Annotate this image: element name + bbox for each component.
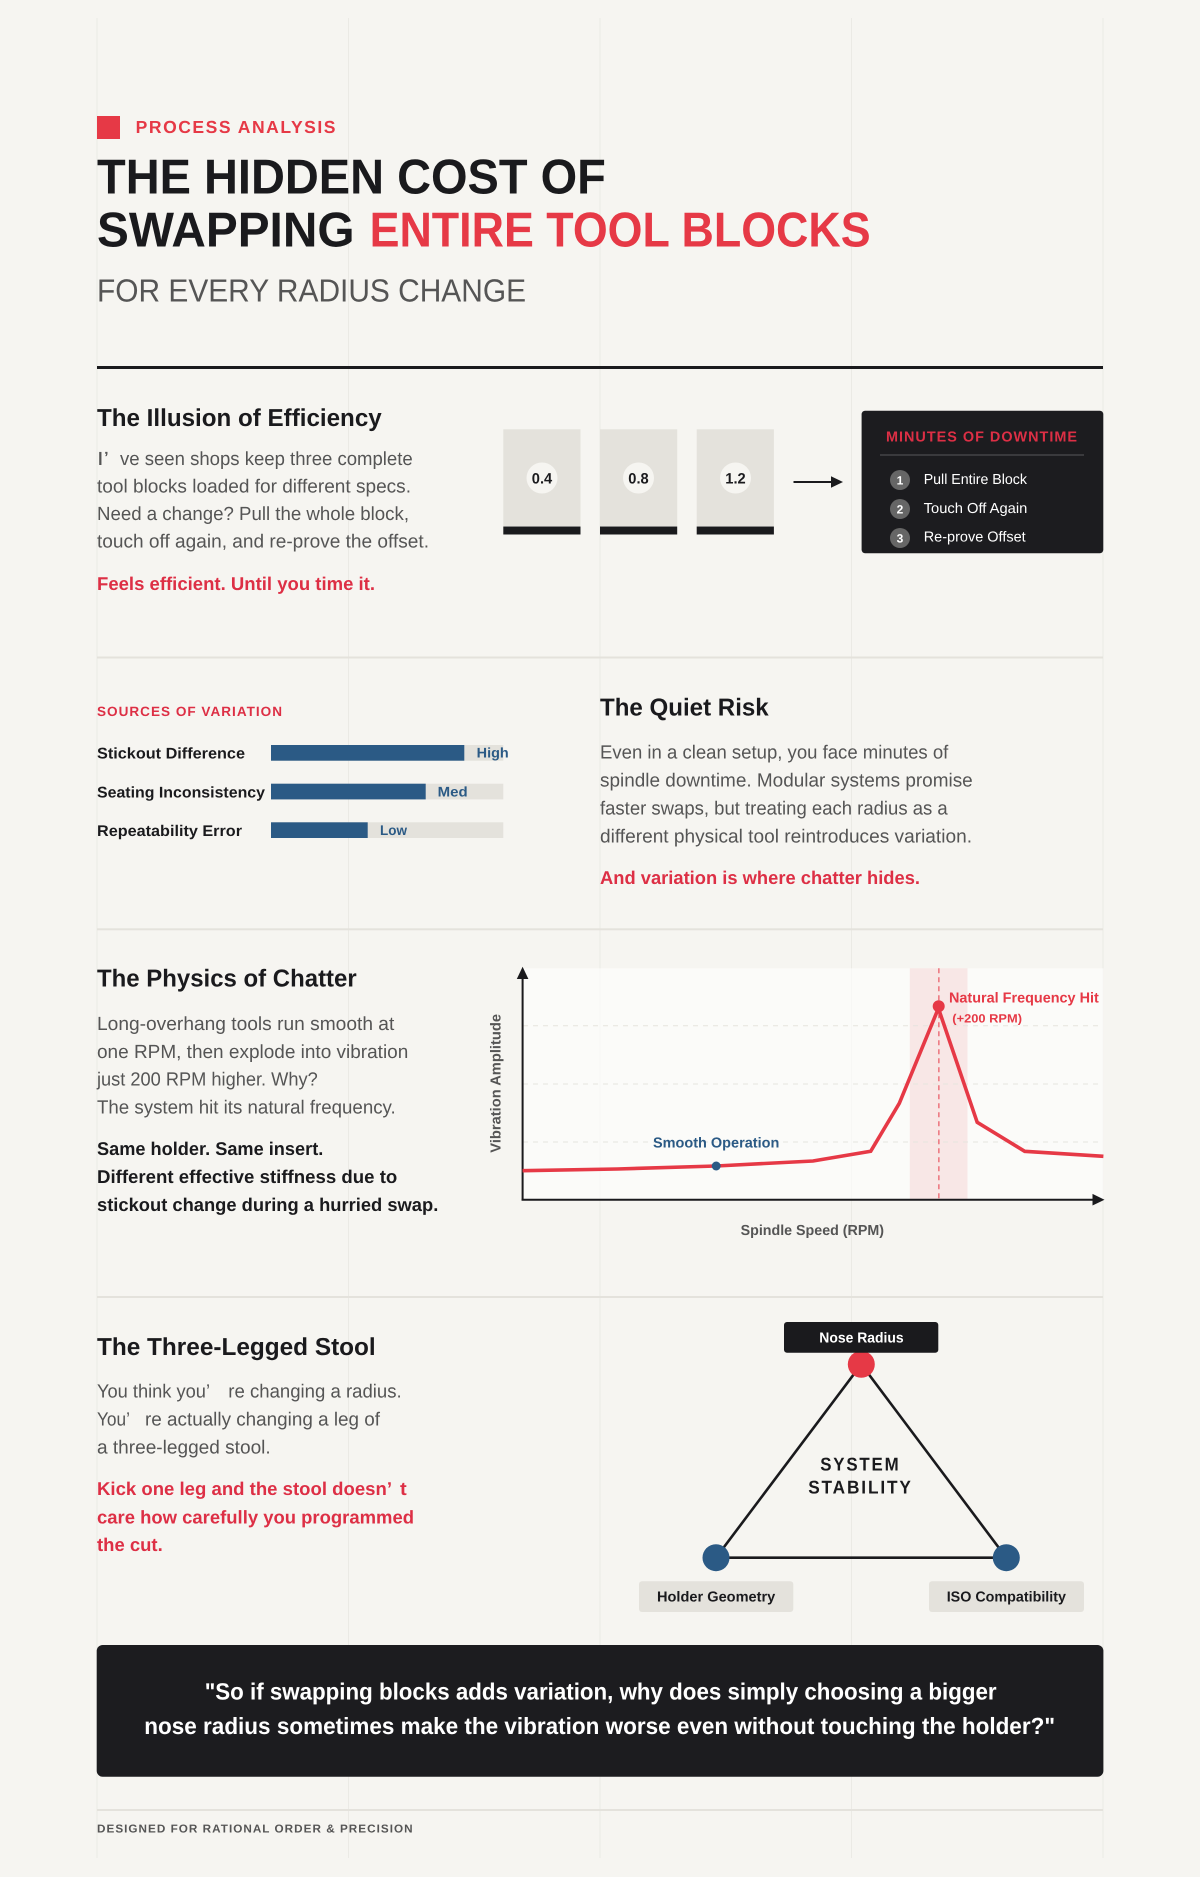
bar: stickout difference: Stickout Difference [97,745,245,762]
tool block 1.2: 1.2 [725,470,746,487]
tool block 0.4: 0.4 [532,470,553,487]
title: SWAPPING [97,204,354,258]
center label: STABILITY [808,1476,913,1498]
step 2: Touch Off Again [924,501,1027,517]
smooth marker [712,1162,721,1170]
natural frequency band [910,968,968,1199]
body text: spindle downtime. Modular systems promise [600,771,973,792]
body text: You’ [97,1410,130,1431]
body text: Long-overhang tools run smooth at [97,1014,395,1035]
annotation: natural frequency: (+200 RPM) [952,1011,1022,1025]
body text: re actually changing a leg of [145,1410,381,1431]
panel: sources of variation [97,704,509,840]
bar: stickout difference: High [477,745,509,761]
callout: And variation is where chatter hides. [600,867,920,888]
step 3: Re-prove Offset [924,530,1026,546]
tool block 0.8: 0.8 [628,470,649,487]
footer: DESIGNED FOR RATIONAL ORDER & PRECISION [97,1824,414,1836]
body text: faster swaps, but treating each radius as a [600,799,948,820]
node: nose radius [784,1322,938,1378]
triangle [716,1364,1006,1558]
callout: the cut. [97,1534,163,1555]
emphasis text: Same holder. Same insert. [97,1138,323,1159]
panel: the illusion of efficiency [97,405,429,594]
node: holder geometry [639,1544,793,1612]
heading: The Quiet Risk [600,694,769,721]
quote banner: "So if swapping blocks adds variation, why does simply choosing a bigger [205,1678,997,1704]
step 3 [890,528,1026,548]
step 1 [890,470,1028,490]
step 2 [890,499,1027,519]
body text: a three-legged stool. [97,1437,271,1458]
bar: repeatability error: Repeatability Error [97,823,242,840]
bar: repeatability error: Low [380,822,407,838]
bar: repeatability error [97,822,503,840]
header [97,116,871,309]
step 1: 1 [897,473,904,487]
icon: red square [97,116,120,139]
callout: Kick one leg and the stool doesn’ [97,1478,392,1499]
node: nose radius: Nose Radius [819,1330,904,1346]
panel: minutes of downtime [862,411,1103,553]
node: iso compatibility: ISO Compatibility [947,1590,1066,1606]
heading: The Three-Legged Stool [97,1334,376,1361]
panel: the quiet risk [600,694,973,888]
line chart: vibration vs spindle speed [488,967,1104,1239]
tool block 0.4 [503,429,580,534]
bar: stickout difference [97,745,509,762]
arrow [794,476,843,488]
body text: Even in a clean setup, you face minutes of [600,743,949,764]
body text: touch off again, and re-prove the offset. [97,532,429,553]
node: iso compatibility [929,1544,1084,1612]
quote banner: nose radius sometimes make the vibration worse even without touching the holder?" [144,1713,1055,1739]
quote banner [97,1645,1103,1777]
node: holder geometry: Holder Geometry [657,1590,775,1606]
panel: the physics of chatter [96,966,438,1215]
vibration curve [523,1008,1103,1171]
emphasis text: Different effective stiffness due to [97,1166,397,1187]
bar: seating inconsistency: Med [438,784,468,800]
eyebrow label: PROCESS ANALYSIS [136,117,337,137]
callout: care how carefully you programmed [97,1506,414,1527]
heading: The Illusion of Efficiency [97,405,382,432]
body text: The system hit its natural frequency. [97,1098,396,1119]
triangle diagram: system stability [639,1322,1084,1612]
step 1: Pull Entire Block [924,472,1028,488]
x axis [522,1194,1104,1206]
body text: different physical tool reintroduces variation. [600,827,972,848]
y axis [517,967,528,1200]
title: ENTIRE TOOL BLOCKS [370,204,871,258]
center label: SYSTEM [820,1454,900,1474]
y axis label: Vibration Amplitude [488,1014,504,1153]
peak marker [933,1000,945,1012]
chart heading: SOURCES OF VARIATION [97,704,283,719]
body text: ve seen shops keep three complete [120,449,413,470]
step 2: 2 [897,502,904,516]
body text: Need a change? Pull the whole block, [97,504,409,525]
annotation: natural frequency [949,991,1099,1025]
title: THE HIDDEN COST OF [97,150,606,204]
annotation: natural frequency: Natural Frequency Hit [949,991,1099,1007]
bar: seating inconsistency [97,784,503,801]
x axis label: Spindle Speed (RPM) [741,1223,884,1239]
callout: t [400,1478,407,1499]
heading: The Physics of Chatter [97,966,357,993]
step 3: 3 [897,531,904,545]
body text: I’ [97,449,109,470]
body text: one RPM, then explode into vibration [97,1042,408,1063]
tool block 1.2 [697,429,774,534]
annotation: smooth operation: Smooth Operation [653,1135,779,1151]
tool block 0.8 [600,429,677,534]
subtitle: FOR EVERY RADIUS CHANGE [97,273,526,309]
body text: just 200 RPM higher. Why? [96,1070,318,1091]
tool blocks diagram [503,429,774,534]
panel: the three-legged stool [97,1334,414,1555]
panel heading: MINUTES OF DOWNTIME [886,430,1078,446]
body text: re changing a radius. [228,1382,402,1403]
emphasis text: stickout change during a hurried swap. [97,1194,438,1215]
callout: Feels efficient. Until you time it. [97,573,375,594]
body text: tool blocks loaded for different specs. [97,476,411,498]
body text: You think you’ [97,1382,210,1403]
bar: seating inconsistency: Seating Inconsistency [97,784,265,801]
